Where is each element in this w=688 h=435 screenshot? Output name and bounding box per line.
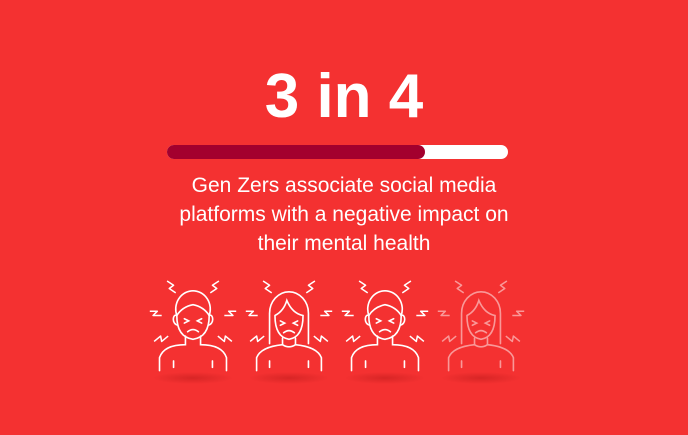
icon: stressed man 2 xyxy=(342,281,428,371)
icons row xyxy=(150,280,524,382)
description text: their mental health xyxy=(258,232,430,255)
progress bar xyxy=(167,145,508,159)
icon: stressed man 1 xyxy=(150,281,236,371)
bar fill xyxy=(167,145,425,159)
description text xyxy=(179,174,509,255)
description text: Gen Zers associate social media xyxy=(192,174,496,197)
icon shadows xyxy=(153,372,521,384)
icon: faded woman xyxy=(438,281,524,371)
icon: stressed woman 1 xyxy=(246,281,332,371)
title: 3 in 4 xyxy=(265,62,423,131)
description text: platforms with a negative impact on xyxy=(179,203,509,226)
